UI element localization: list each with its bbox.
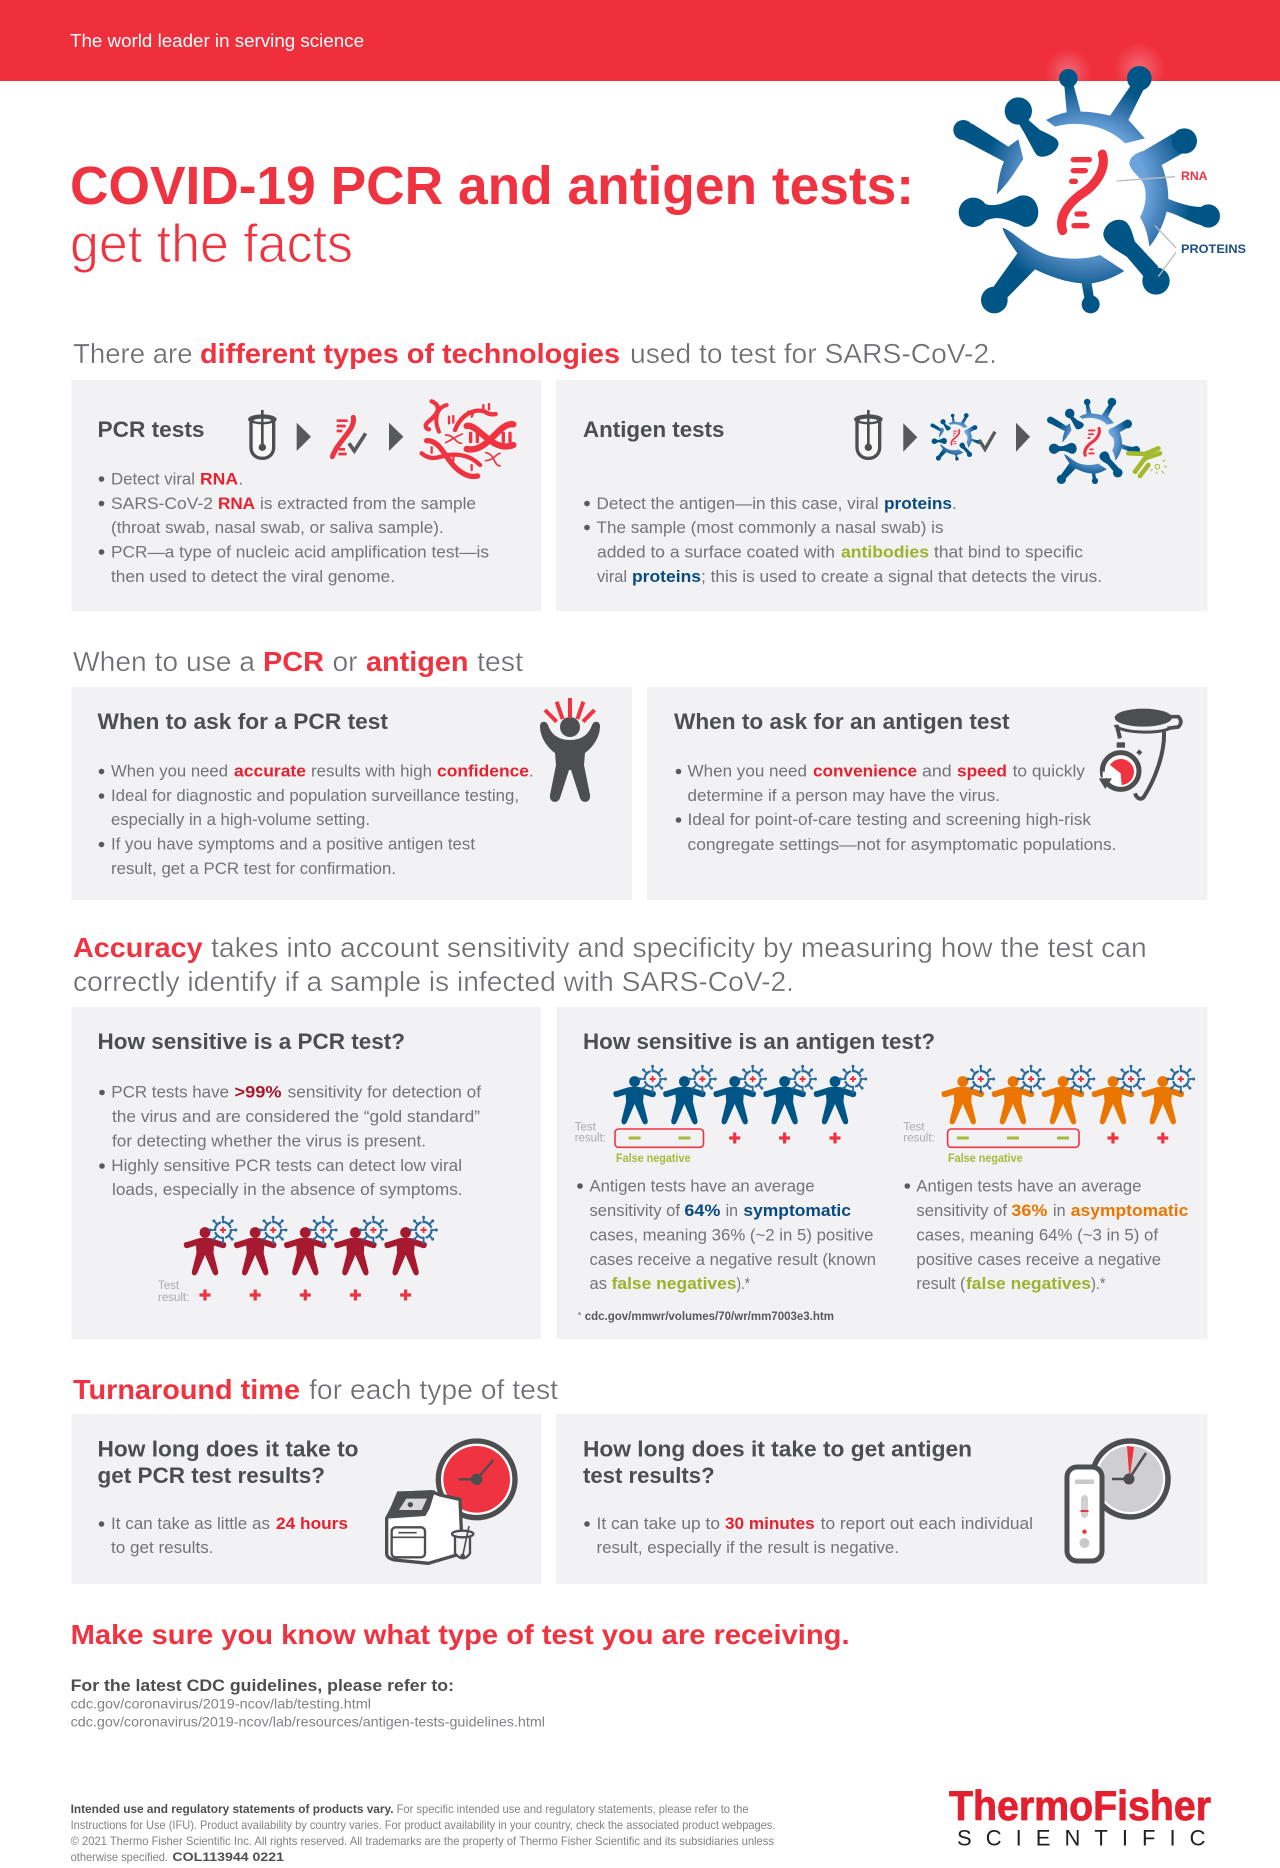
icon: tube with stopwatch — [1097, 709, 1181, 799]
heading: accuracy — [73, 932, 1147, 997]
logo: Thermo Fisher Scientific: SCIENTIFIC — [957, 1826, 1206, 1851]
bullet list: and — [922, 762, 952, 781]
bullet list: accurate — [234, 762, 306, 781]
footnote: * — [578, 1311, 582, 1320]
bullet list — [99, 1083, 481, 1199]
icon: sample tube — [854, 410, 883, 458]
heading: different types of technologies — [73, 338, 997, 369]
bullet list: PCR tests have — [111, 1083, 229, 1102]
panel: when to ask for an antigen test — [647, 687, 1208, 900]
heading: turnaround time — [73, 1374, 558, 1405]
heading: PCR tests: PCR tests — [98, 417, 204, 442]
icon: coronavirus with RNA and proteins labels: RNA — [1181, 169, 1208, 183]
bullet list: Ideal for diagnostic and population surveillance testing, — [111, 786, 519, 805]
heading: How long does it take to — [98, 1437, 358, 1462]
title: get the facts — [70, 214, 353, 274]
bullet list: When you need — [688, 762, 807, 781]
logo: Thermo Fisher Scientific: ThermoFisher — [949, 1782, 1211, 1829]
icon: RNA strand with check — [332, 417, 366, 457]
tagline: The world leader in serving science — [70, 31, 364, 51]
icon: virus with antibody — [1047, 398, 1167, 484]
icon row: five PCR positive people — [184, 1217, 436, 1275]
bullet list: determine if a person may have the virus. — [688, 786, 1000, 805]
bullet list — [99, 470, 489, 586]
panel: how sensitive is an antigen test — [556, 1007, 1208, 1339]
bullet list: for detecting whether the virus is present. — [112, 1132, 426, 1150]
text: symptomatic: sensitivity of — [590, 1201, 680, 1220]
call to action: Make sure you know what type of test you are receiving. — [71, 1619, 850, 1650]
bullet list: result, get a PCR test for confirmation. — [111, 859, 396, 878]
text: symptomatic: Antigen tests have an average — [590, 1177, 814, 1196]
heading — [98, 1437, 358, 1488]
bullet list: It can take up to — [596, 1514, 720, 1533]
title: COVID-19 PCR and antigen tests: — [70, 156, 914, 216]
bullet list: confidence — [437, 762, 529, 781]
bullet list: to get results. — [111, 1538, 214, 1557]
text: symptomatic: 64% — [684, 1201, 720, 1220]
bullet list: congregate settings—not for asymptomatic populations. — [688, 835, 1116, 854]
bullet list: RNA — [218, 494, 255, 513]
test result row: asymptomatic: Test — [903, 1122, 925, 1134]
text: asymptomatic: positive cases receive a negative — [916, 1250, 1161, 1269]
icon: clock and test cassette — [1067, 1441, 1168, 1561]
heading: different types of technologies: used to test for SARS-CoV-2. — [630, 338, 997, 369]
CDC guidelines: cdc.gov/coronavirus/2019-ncov/lab/resources/antigen-tests-guidelines.html — [71, 1714, 545, 1730]
text: asymptomatic: result ( — [916, 1274, 966, 1293]
legal text: COL113944 0221 — [172, 1850, 284, 1864]
text: asymptomatic: Antigen tests have an average — [916, 1177, 1141, 1196]
bullet list: . — [529, 762, 534, 781]
icon: amplified RNA strands — [422, 401, 513, 476]
bullet list: >99% — [234, 1083, 282, 1102]
test result row: asymptomatic: False negative — [948, 1153, 1023, 1165]
bullet list: RNA — [200, 470, 238, 488]
test result row: symptomatic: Test — [575, 1122, 597, 1134]
heading: How long does it take to get antigen — [583, 1437, 972, 1462]
heading: When to ask for a PCR test — [98, 709, 389, 734]
arrow — [903, 423, 917, 452]
heading: accuracy: Accuracy — [73, 932, 203, 963]
bullet list: ; this is used to create a signal that detects the virus. — [701, 567, 1102, 586]
bullet list: If you have symptoms and a positive antigen test — [111, 835, 475, 854]
bullet list: proteins — [884, 494, 952, 513]
test result row: symptomatic: False negative — [616, 1153, 690, 1165]
legal text: Instructions for Use (IFU). Product availability by country varies. For product availability in your country, check the associated product webpages. — [71, 1818, 775, 1832]
bullet list: . — [952, 494, 957, 513]
bullet list: to quickly — [1013, 762, 1085, 781]
heading: turnaround time: Turnaround time — [73, 1374, 300, 1405]
title — [70, 156, 914, 274]
header bar — [0, 0, 1280, 81]
text: asymptomatic: ).* — [1091, 1274, 1106, 1293]
test result row: asymptomatic: result: — [903, 1133, 935, 1145]
bullet list — [584, 494, 1102, 586]
logo: Thermo Fisher Scientific — [949, 1782, 1211, 1851]
text: symptomatic: symptomatic — [743, 1201, 851, 1220]
icon row: asymptomatic people — [942, 1066, 1194, 1124]
legal text: For specific intended use and regulatory statements, please refer to the — [397, 1802, 749, 1816]
bullet list: to report out each individual — [821, 1514, 1033, 1533]
test result row: Test — [158, 1280, 180, 1292]
text: symptomatic: as — [590, 1274, 607, 1293]
heading: when to use — [73, 646, 523, 677]
bullet list: speed — [957, 762, 1007, 781]
bullet list — [584, 1514, 1033, 1557]
text: asymptomatic: in — [1053, 1201, 1066, 1220]
bullet list: then used to detect the viral genome. — [111, 567, 395, 586]
bullet list — [676, 762, 1116, 854]
bullet list: SARS-CoV-2 — [111, 494, 213, 513]
heading: test results? — [583, 1463, 715, 1488]
legal text: © 2021 Thermo Fisher Scientific Inc. All rights reserved. All trademarks are the property of Thermo Fisher Scientific and its subsidiaries unless — [71, 1834, 774, 1848]
test result row: symptomatic: result: — [575, 1133, 606, 1145]
text: symptomatic: ).* — [736, 1274, 750, 1293]
text: asymptomatic: false negatives — [966, 1274, 1091, 1293]
icon row: symptomatic people — [613, 1066, 866, 1124]
legal text — [71, 1802, 775, 1864]
panel: Antigen tests — [556, 380, 1208, 611]
icon: coronavirus with RNA and proteins labels: PROTEINS — [1181, 242, 1246, 256]
bullet list — [99, 1514, 348, 1557]
bullet list: 24 hours — [276, 1514, 348, 1533]
icon: small virus with check — [931, 413, 995, 461]
panel: PCR turnaround — [72, 1414, 542, 1584]
text: asymptomatic: asymptomatic — [1071, 1201, 1188, 1220]
heading: when to use: When to use a — [73, 646, 255, 677]
bullet list: PCR—a type of nucleic acid amplification test—is — [111, 542, 489, 562]
bullet list: Ideal for point-of-care testing and screening high-risk — [688, 810, 1091, 829]
heading: get PCR test results? — [98, 1463, 325, 1488]
legal text: otherwise specified. — [71, 1850, 168, 1864]
bullet list: The sample (most commonly a nasal swab) is — [596, 518, 944, 537]
heading: when to use: antigen — [366, 646, 468, 677]
bullet list: It can take as little as — [111, 1514, 270, 1533]
footnote: cdc.gov/mmwr/volumes/70/wr/mm7003e3.htm — [585, 1311, 834, 1323]
bullet list — [99, 762, 534, 878]
test result row: result: — [158, 1292, 189, 1304]
bullet list: especially in a high-volume setting. — [111, 810, 370, 829]
test result row — [158, 1280, 411, 1304]
bullet list: the virus and are considered the “gold standard” — [112, 1107, 480, 1126]
heading: How sensitive is a PCR test? — [98, 1029, 405, 1054]
heading: when to use: or — [332, 646, 358, 677]
CDC guidelines: cdc.gov/coronavirus/2019-ncov/lab/testing.html — [71, 1696, 371, 1712]
text: symptomatic: in — [726, 1201, 738, 1220]
text: asymptomatic: 36% — [1011, 1201, 1047, 1220]
CDC guidelines — [71, 1676, 545, 1730]
arrow — [1016, 423, 1030, 452]
bullet list: convenience — [813, 762, 917, 781]
bullet list: (throat swab, nasal swab, or saliva sample). — [111, 518, 444, 537]
bullet list: Highly sensitive PCR tests can detect low viral — [111, 1156, 462, 1175]
bullet list: result, especially if the result is negative. — [596, 1538, 899, 1557]
bullet list: antibodies — [841, 542, 929, 562]
bullet list: proteins — [632, 567, 701, 586]
icon: person with alert rays — [540, 698, 600, 802]
heading: different types of technologies: different types of technologies — [200, 338, 620, 369]
heading: Antigen tests: Antigen tests — [583, 417, 724, 442]
icon: sample tube — [248, 410, 277, 458]
panel: antigen turnaround — [556, 1414, 1208, 1584]
test result row: asymptomatic — [903, 1122, 1168, 1165]
text: symptomatic — [577, 1177, 876, 1293]
bullet list: loads, especially in the absence of symptoms. — [112, 1180, 463, 1199]
heading: When to ask for an antigen test — [674, 709, 1010, 734]
text: symptomatic: cases, meaning 36% (~2 in 5) positive — [590, 1226, 874, 1244]
test result row: symptomatic — [575, 1122, 840, 1165]
bullet list: that bind to specific — [934, 542, 1084, 562]
arrow — [389, 423, 403, 451]
legal text: Intended use and regulatory statements of products vary. — [71, 1802, 393, 1816]
CDC guidelines: For the latest CDC guidelines, please refer to: — [71, 1676, 454, 1695]
panel: how sensitive is a PCR test — [72, 1007, 541, 1339]
text: symptomatic: cases receive a negative result (known — [590, 1250, 876, 1269]
bullet list: 30 minutes — [725, 1514, 815, 1533]
text: asymptomatic: sensitivity of — [916, 1201, 1007, 1220]
bullet list: When you need — [111, 762, 228, 781]
text: asymptomatic — [904, 1177, 1188, 1293]
heading: accuracy: correctly identify if a sample is infected with SARS-CoV-2. — [73, 966, 794, 997]
bullet list: viral — [597, 567, 627, 586]
bullet list: results with high — [311, 762, 432, 781]
bullet list: Detect the antigen—in this case, viral — [596, 494, 878, 513]
panel: when to ask for a PCR test — [72, 687, 632, 900]
bullet list: added to a surface coated with — [597, 542, 835, 562]
text: symptomatic: false negatives — [612, 1274, 736, 1293]
heading: How sensitive is an antigen test? — [583, 1029, 935, 1054]
bullet list: sensitivity for detection of — [288, 1083, 481, 1102]
heading: when to use: test — [477, 646, 523, 677]
heading: turnaround time: for each type of test — [309, 1374, 558, 1405]
heading: when to use: PCR — [263, 646, 324, 677]
arrow — [297, 423, 311, 451]
bullet list: Detect viral — [111, 470, 195, 488]
bullet list: is extracted from the sample — [260, 494, 476, 513]
heading — [583, 1437, 972, 1488]
panel: PCR tests — [72, 380, 542, 611]
bullet list: . — [238, 470, 243, 488]
icon: clock and PCR machine — [387, 1441, 515, 1563]
heading: different types of technologies: There are — [73, 338, 193, 369]
heading: accuracy: takes into account sensitivity and specificity by measuring how the test can — [211, 932, 1147, 963]
text: asymptomatic: cases, meaning 64% (~3 in 5) of — [916, 1226, 1158, 1244]
icon: coronavirus with RNA and proteins labels — [953, 42, 1246, 313]
